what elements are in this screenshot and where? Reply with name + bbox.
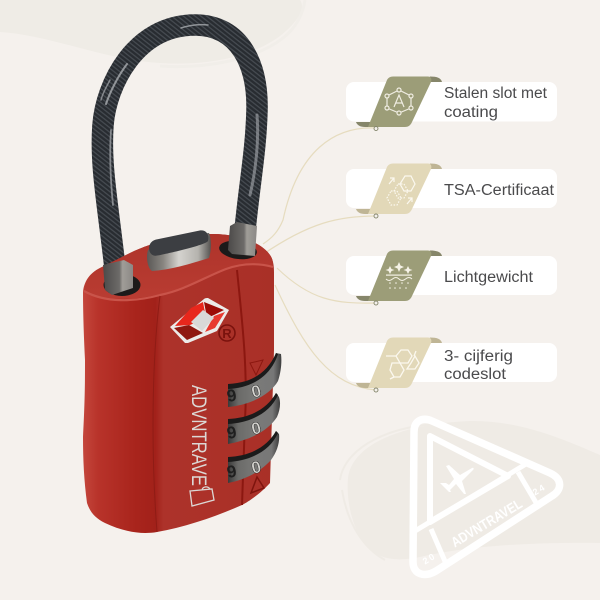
label text: [444, 348, 513, 383]
combination wheel 2: [225, 393, 280, 444]
registered mark: R: [222, 326, 232, 341]
ribbon: [356, 338, 442, 388]
combination wheel 3: 9: [225, 462, 238, 482]
upper triangle mark: [250, 360, 263, 375]
padlock: [83, 25, 281, 533]
icon: lightweight sparkles: [386, 262, 412, 289]
icon: coated steel: [385, 88, 413, 115]
node: [374, 301, 378, 305]
node: [374, 388, 378, 392]
ribbon: [356, 164, 442, 214]
ribbon: [356, 250, 442, 301]
label text: TSA-Certificaat: [444, 182, 555, 199]
node: [374, 126, 378, 130]
logo text: ADVNTRAVEL: ADVNTRAVEL: [448, 495, 525, 550]
connector lines: [262, 128, 376, 390]
ribbon: [356, 76, 442, 127]
background blob: top: [0, 0, 305, 67]
center button: [147, 230, 211, 271]
label text: coating: [444, 104, 498, 121]
lock body: [83, 234, 274, 533]
label text: Lichtgewicht: [444, 269, 534, 286]
TSA logo: [170, 298, 229, 343]
lower triangle mark: [251, 477, 264, 493]
right ferrule: [228, 222, 257, 256]
right hole: [218, 238, 258, 262]
wordmark on lock: ADVNTRAVE: [187, 385, 210, 486]
front panel seam: [153, 296, 160, 532]
feature label: Stalen slot met coating: [346, 76, 557, 130]
logo badge: [413, 419, 560, 574]
top bevel: [84, 234, 273, 299]
icon: molecule hexagons: [386, 350, 419, 379]
background blob: bottom right: [340, 421, 600, 560]
feature label: TSA-Certificaat: [346, 164, 557, 218]
combination wheel 2: 9: [225, 423, 238, 443]
groove: [237, 270, 246, 505]
label text: 3- cijferig: [444, 348, 513, 365]
icon: certified hexagons: [387, 176, 415, 205]
combination wheel 1: 0: [249, 381, 263, 402]
node: [374, 214, 378, 218]
combination wheel 3: [225, 431, 279, 483]
combination wheel 3: 0: [249, 457, 263, 478]
label text: [444, 85, 548, 121]
label text: Stalen slot met: [444, 85, 548, 102]
left ferrule: [103, 260, 133, 295]
logo text: 24: 24: [531, 482, 548, 497]
cable highlights: [101, 25, 258, 205]
combination wheel 1: [225, 353, 281, 407]
feature label: 3- cijferig codeslot: [346, 338, 557, 392]
combination wheel 2: 0: [249, 418, 263, 439]
registered mark: [219, 325, 235, 341]
feature label: Lichtgewicht: [346, 250, 557, 305]
combination wheel 1: 9: [225, 386, 238, 406]
icon: airplane: [440, 465, 474, 494]
icon: luggage: [190, 487, 214, 506]
cable: [101, 25, 258, 268]
label text: codeslot: [444, 366, 507, 383]
bevel ridge: [84, 264, 273, 300]
left hole: [104, 274, 140, 296]
logo text: 20: 20: [421, 551, 438, 566]
